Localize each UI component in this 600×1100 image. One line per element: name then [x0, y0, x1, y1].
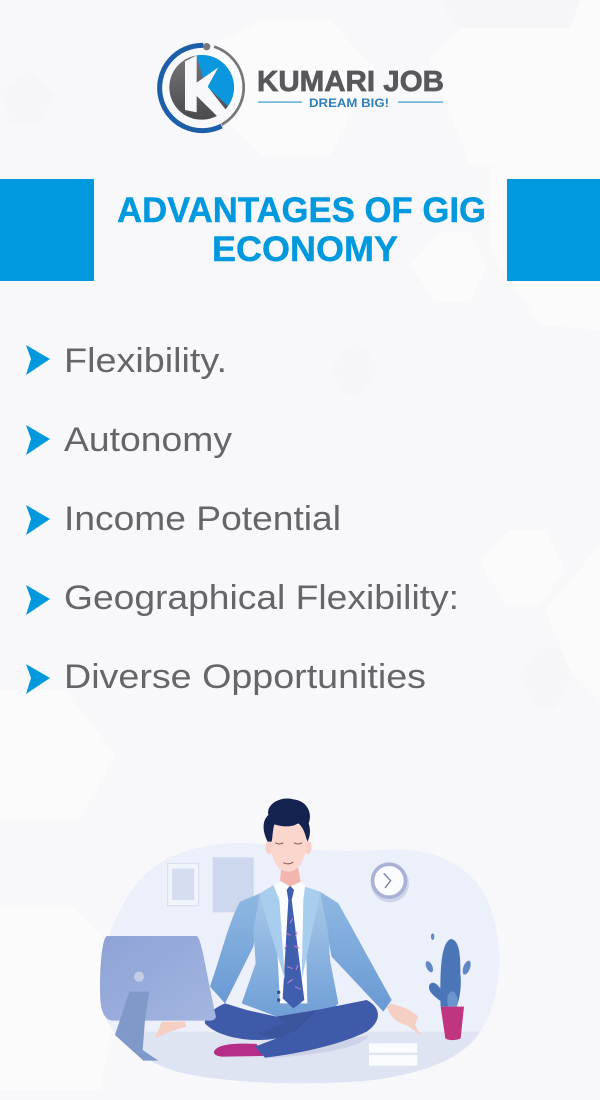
title: ECONOMY	[212, 230, 398, 269]
books	[369, 1043, 417, 1066]
item: Income Potential: Income Potential	[64, 500, 341, 538]
icon: K logo	[160, 43, 244, 131]
potted plant	[424, 933, 472, 1040]
illustration: meditating businessman	[100, 799, 499, 1083]
item: Flexibility: Flexibility.	[64, 342, 227, 380]
lapels	[260, 885, 285, 980]
background blob	[100, 843, 499, 1083]
hands	[387, 1003, 422, 1036]
left sleeve	[210, 893, 260, 1003]
item: Autonomy: Autonomy	[64, 421, 232, 459]
logo	[160, 43, 444, 131]
torso	[242, 892, 338, 1017]
logo wordmark: KUMARI JOB	[257, 66, 444, 98]
item: Geographical Flexibility: Geographical Flexibility:	[64, 579, 459, 617]
icon: wall clock	[371, 862, 409, 902]
item: Diverse Opportunities: Diverse Opportunities	[64, 658, 426, 696]
right sleeve	[320, 892, 392, 1012]
wall pictures	[168, 857, 254, 912]
shirt	[274, 877, 307, 1003]
head	[264, 799, 312, 887]
title: ADVANTAGES OF GIG	[117, 191, 486, 230]
tie	[283, 885, 304, 1008]
logo tagline: DREAM BIG!	[309, 98, 389, 110]
jacket	[210, 877, 392, 1017]
bullet list	[26, 342, 459, 696]
floor	[115, 1032, 480, 1083]
legs	[205, 1000, 378, 1058]
left title band	[0, 179, 94, 281]
right title band	[507, 179, 600, 281]
computer monitor	[100, 936, 216, 1061]
